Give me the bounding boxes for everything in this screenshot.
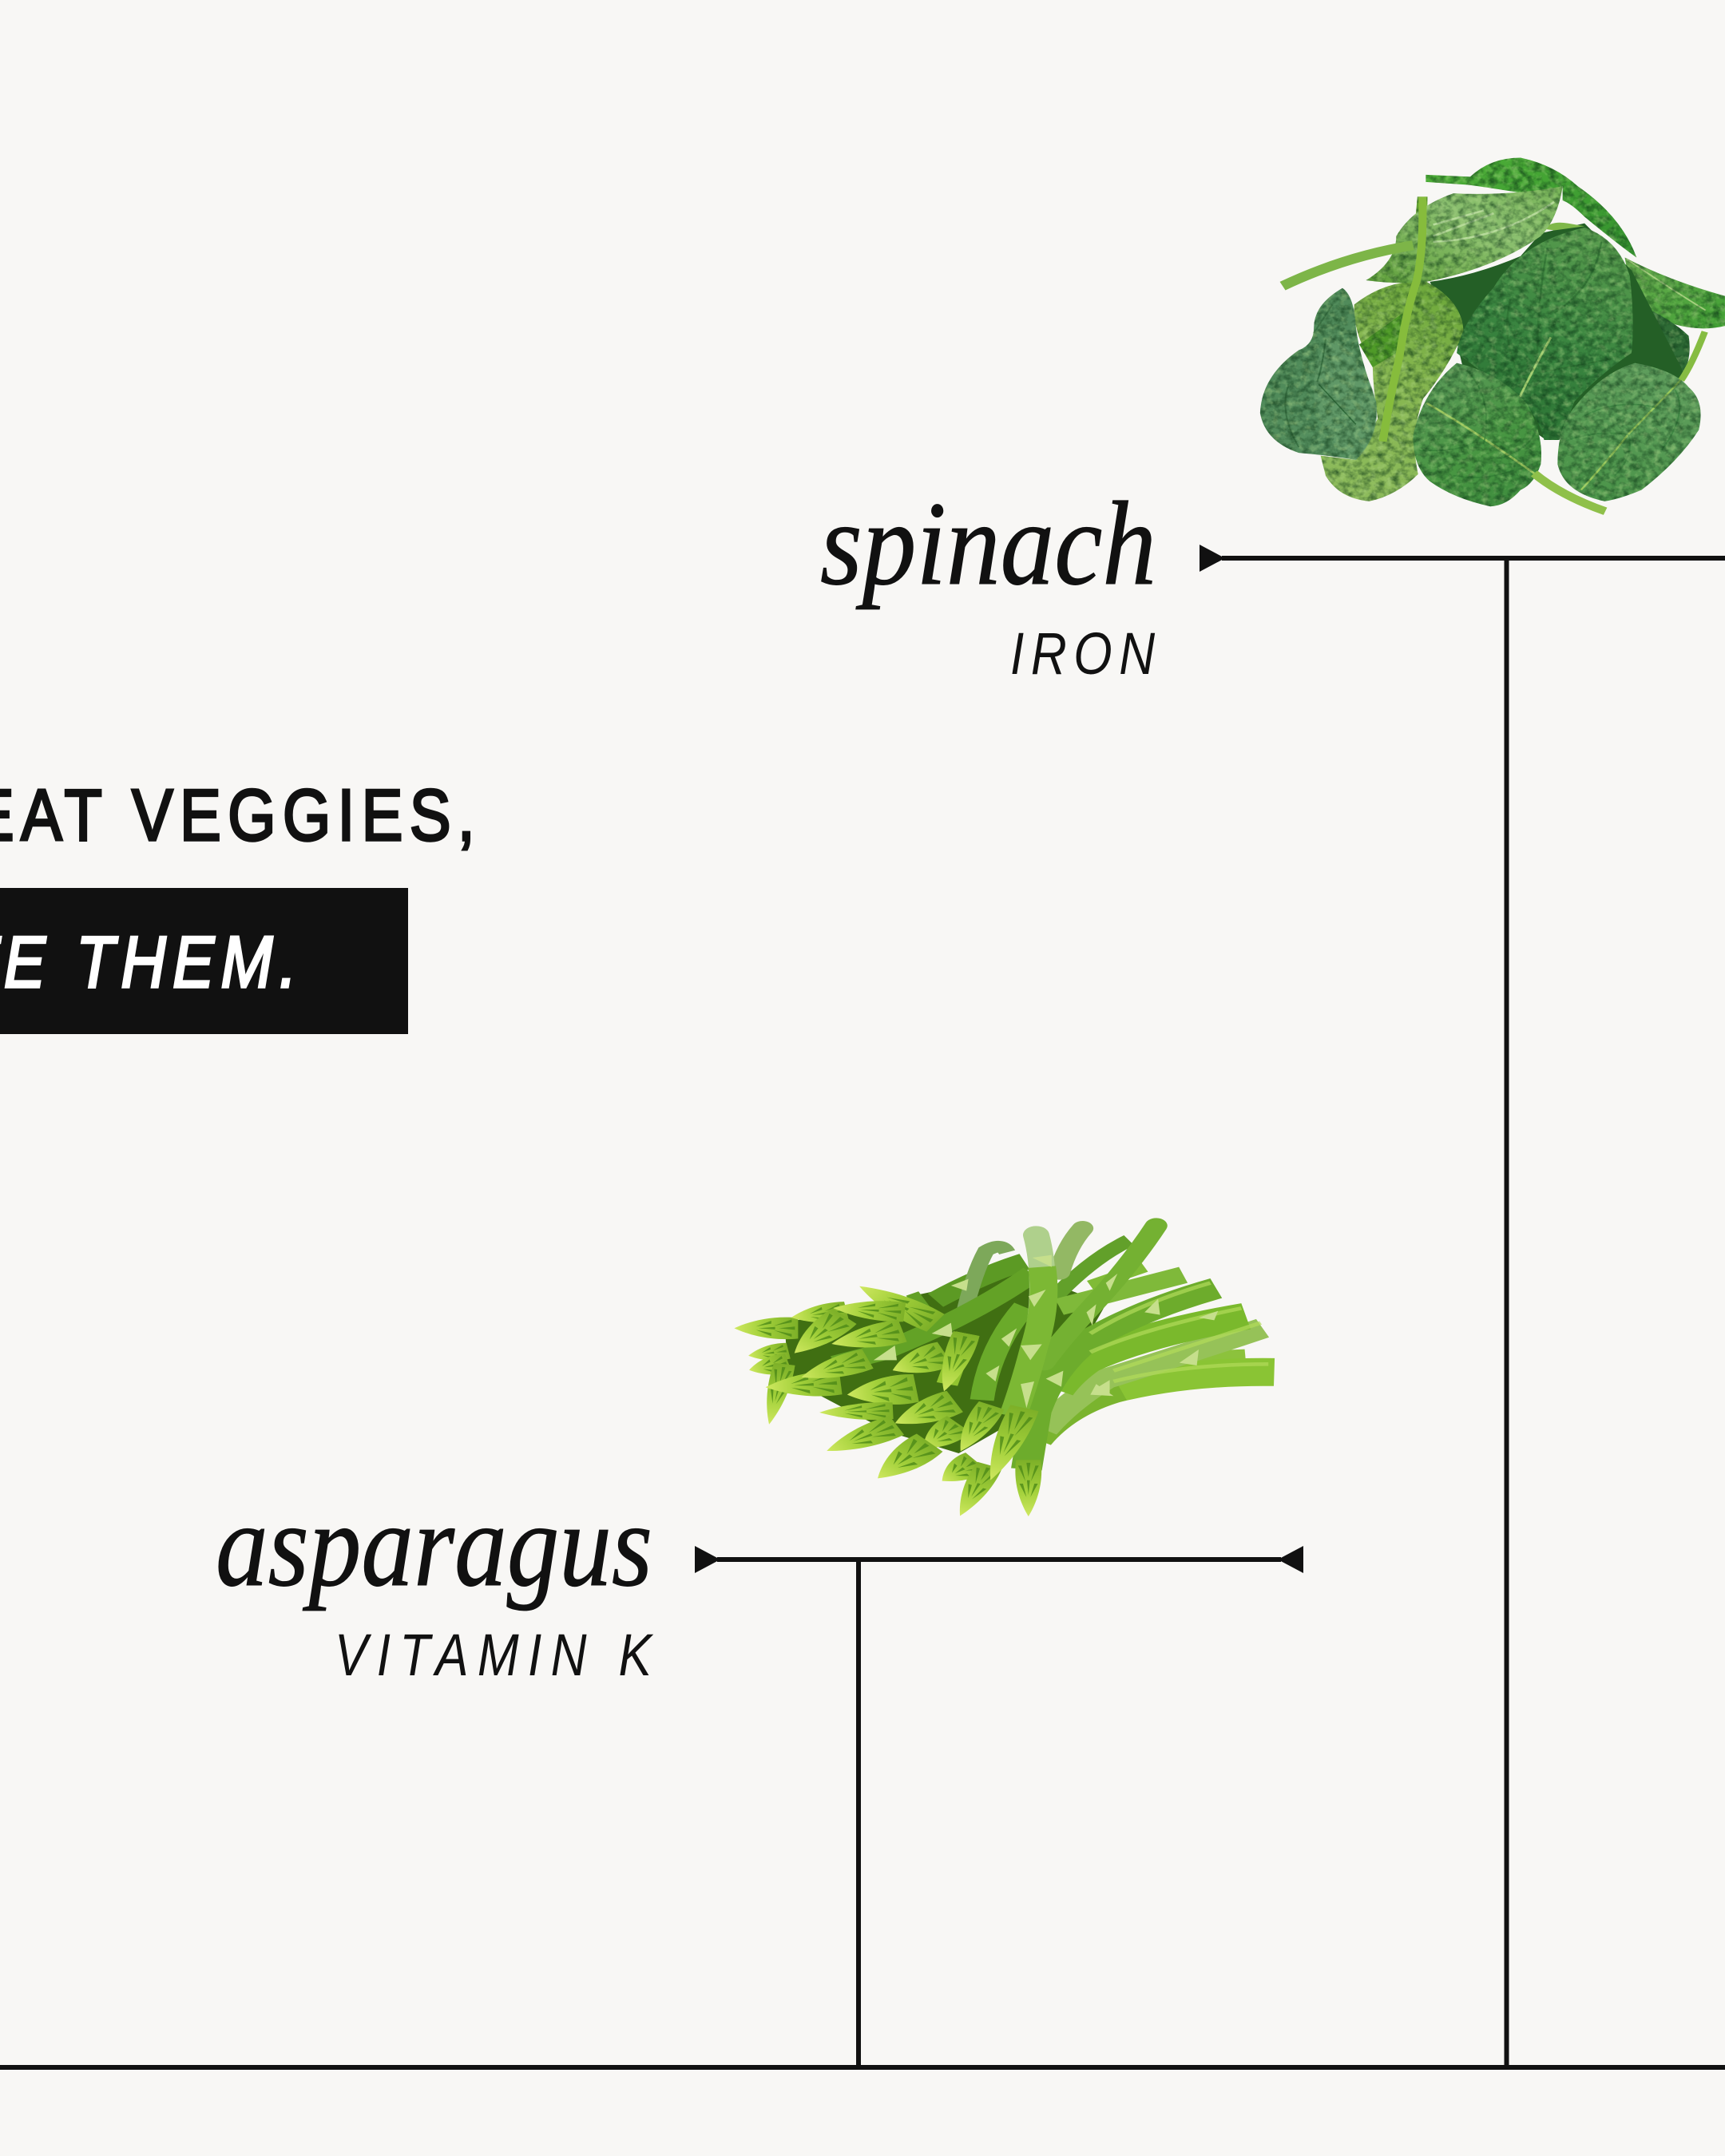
stem of top leaf — [1283, 245, 1413, 286]
arrow: asparagus right marker — [1278, 1546, 1303, 1573]
dark back leaf — [1625, 299, 1690, 375]
crumpled left leaf — [1260, 288, 1377, 460]
right leaf — [1625, 257, 1725, 328]
dark interior — [784, 1272, 1106, 1453]
stem of long leaf — [1382, 196, 1422, 442]
tips — [734, 1277, 1041, 1520]
top back leaf — [1426, 157, 1636, 257]
label: asparagus: asparagus — [216, 1479, 652, 1611]
arrow: spinach marker — [1200, 545, 1225, 572]
label: spinach — [820, 478, 1162, 687]
bracts — [874, 1255, 1218, 1408]
label: spinach: spinach — [820, 478, 1156, 610]
illustration: spinach leaves — [1260, 157, 1725, 511]
stalk highlights — [1090, 1283, 1268, 1381]
baseline axis — [0, 2065, 1725, 2070]
lower stalk — [1106, 1372, 1275, 1391]
sublabel: vitamin k: VITAMIN K — [335, 1623, 660, 1688]
bottom right leaf — [1557, 363, 1701, 501]
bottom centre leaf — [1413, 363, 1541, 506]
bar: spinach — [1200, 545, 1725, 2067]
stem of bottom centre leaf — [1534, 474, 1605, 511]
arrow: asparagus left marker — [695, 1546, 720, 1573]
callout: black banner — [0, 888, 408, 1034]
back stalks — [835, 1226, 1275, 1469]
label: asparagus — [216, 1479, 660, 1688]
back shadow — [1430, 224, 1685, 438]
big central leaf — [1457, 228, 1633, 440]
top underside leaf — [1366, 186, 1563, 283]
bar: asparagus — [695, 1546, 1303, 2067]
sublabel: iron: IRON — [1010, 621, 1162, 687]
illustration: asparagus bunch — [734, 1226, 1275, 1520]
stem of bottom right leaf — [1681, 331, 1705, 380]
long pale leaf — [1321, 196, 1464, 501]
